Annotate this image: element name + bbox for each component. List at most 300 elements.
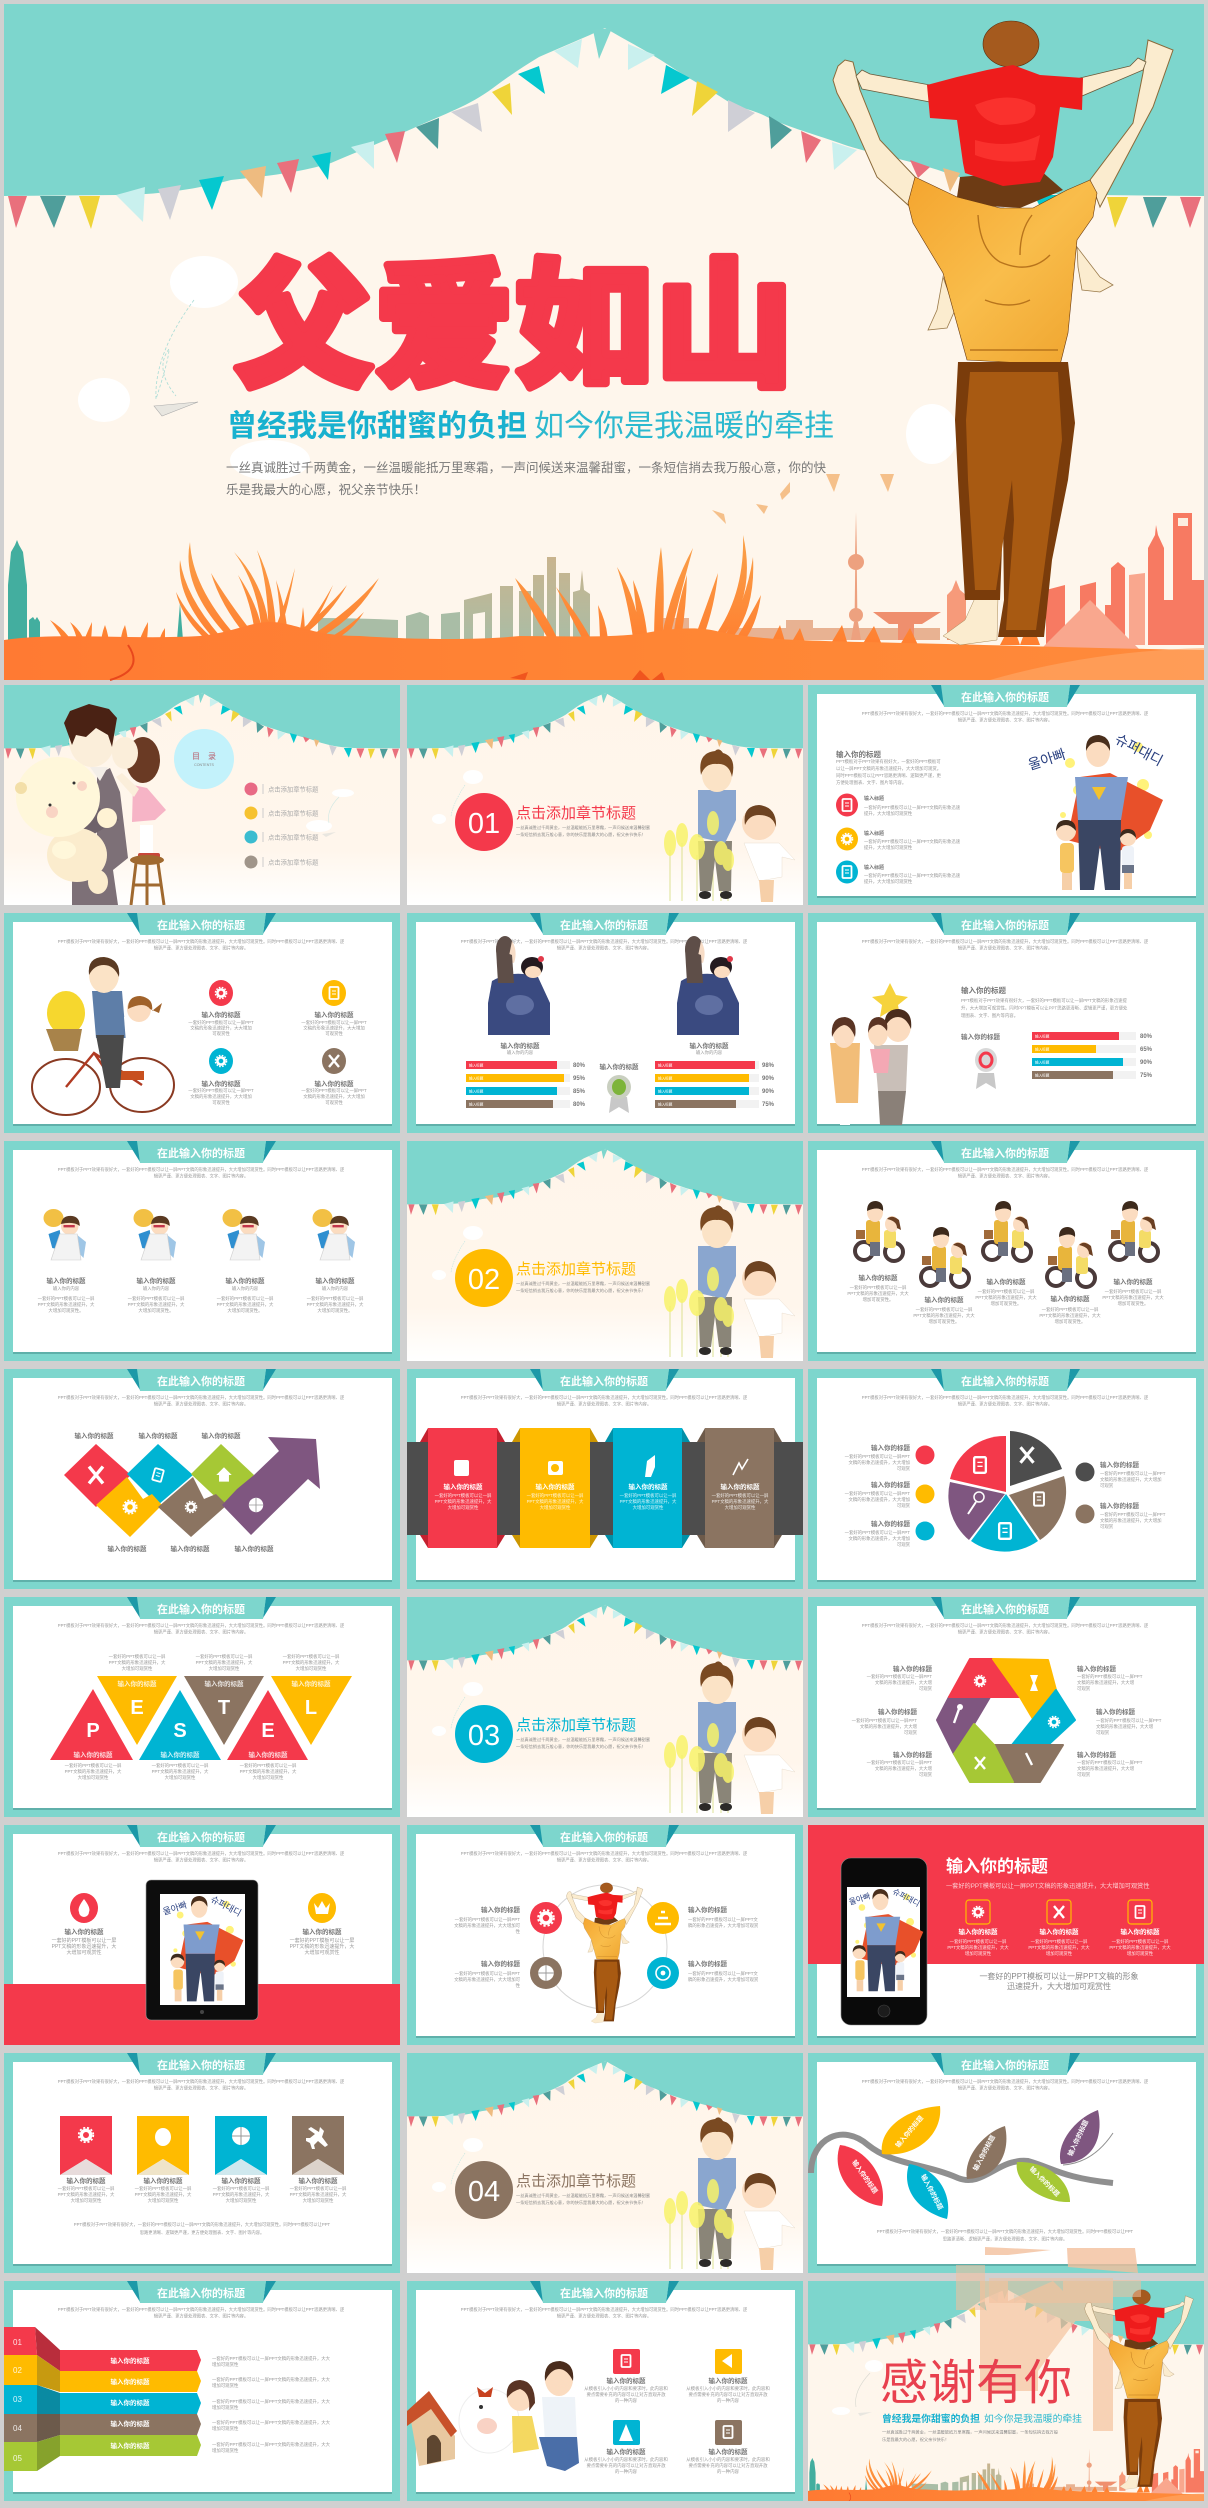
right heading bbox=[690, 1042, 728, 1054]
chapter description: 一条短信捎去我万般心意，你的快乐是我最大的心愿，祝父亲节快乐！ bbox=[516, 831, 646, 838]
description: 辑更严谨、更方便处理图表、文字、图片等内容。 bbox=[958, 1172, 1052, 1180]
bar label and badge: 输入你的标题 bbox=[961, 1032, 1000, 1041]
text blocks: 可观赏性 bbox=[212, 1030, 230, 1037]
right text: 增加可观赏性 bbox=[212, 2447, 239, 2454]
top text blocks: 一套好的PPT模板可以让一屏 bbox=[283, 1653, 340, 1660]
column 1: 大增加可观赏性。 bbox=[48, 1307, 84, 1314]
text blocks: 要点需要补充的内容可以让对方直观开放 bbox=[586, 2391, 666, 2398]
text blocks: 一套好的PPT模板可以让一屏PPT bbox=[188, 1019, 254, 1026]
item 3: PPT文稿的形象迅速提升，大大 bbox=[975, 1294, 1037, 1301]
leaves: 输入你的标题 bbox=[850, 2158, 880, 2196]
column 3: PPT文稿的形象迅速提升，大 bbox=[217, 1301, 274, 1308]
description: 辑更严谨、更方便处理图表、文字、图片等内容。 bbox=[557, 1400, 651, 1408]
right text blocks: 可观赏 bbox=[1100, 1482, 1114, 1489]
right text blocks: 文稿的形象迅速提升，大大增加 bbox=[1100, 1476, 1161, 1483]
chapter description bbox=[516, 1280, 650, 1294]
bottom text blocks: 一套好的PPT模板可以让一屏 bbox=[65, 1762, 122, 1769]
city skyline and grass bbox=[4, 512, 1204, 680]
left dots bbox=[916, 1446, 934, 1540]
text blocks: 要点需要补充的内容可以让对方直观开放 bbox=[688, 2462, 768, 2469]
flag 1: 大增加可观赏性 bbox=[71, 2197, 102, 2204]
ribbon title: 在此输入你的标题 bbox=[961, 1602, 1049, 1616]
description: 辑更严谨、更方便处理图表、文字、图片等内容。 bbox=[958, 944, 1052, 952]
right text blocks: 可观赏 bbox=[1100, 1523, 1114, 1530]
feature 3 bbox=[1109, 1927, 1171, 1957]
bottom labels: 输入你的标题 bbox=[108, 1544, 147, 1553]
text blocks: 要点需要补充的内容可以让对方直观开放 bbox=[586, 2462, 666, 2469]
description: 辑更严谨、更方便处理图表、文字、图片等内容。 bbox=[958, 716, 1052, 724]
description bbox=[461, 1394, 748, 1408]
phone with illustration: 슈퍼대디 bbox=[891, 1887, 921, 1909]
slide: chapter 03 bbox=[407, 1597, 803, 1817]
right bar chart: 输入标题 bbox=[658, 1062, 673, 1068]
city skyline and grass bbox=[808, 2449, 1204, 2504]
icon list: 一套好的PPT模板可以让一屏PPT文稿的形象迅速 bbox=[864, 872, 961, 879]
description: PPT模板对于PPT效果有很好大，一套好的PPT模板可以让一屏PPT文稿的形象迅速提升，大大增加可观赏性。同时PPT模板可以让PPT思路更清晰、逻 bbox=[58, 2078, 345, 2085]
icon circles bbox=[530, 1902, 679, 1989]
icons bbox=[613, 2349, 742, 2445]
right bar chart: 98% bbox=[762, 1063, 775, 1069]
text blocks: 从模板引入小小的内容和要求时，此内容和 bbox=[584, 2456, 668, 2463]
slide: thank you bbox=[808, 2271, 1204, 2504]
bottom text blocks: 大增加可观赏性 bbox=[165, 1774, 196, 1781]
chapter description: 一丝真诚胜过千两黄金，一丝温暖能抵万里寒霜，一声问候送来温馨甜蜜 bbox=[516, 2192, 650, 2199]
description: PPT模板对于PPT效果有很好大，一套好的PPT模板可以让一屏PPT文稿的形象迅速提升，大大增加可观赏性。同时PPT模板可以让PPT思路更清晰、逻 bbox=[461, 938, 748, 945]
left bar chart: 80% bbox=[573, 1102, 586, 1108]
description: PPT模板对于PPT效果有很好大，一套好的PPT模板可以让一屏PPT文稿的形象迅速提升，大大增加可观赏性。同时PPT模板可以让PPT思路更清晰、逻 bbox=[461, 2306, 748, 2313]
left text blocks: 可观赏 bbox=[919, 1771, 933, 1778]
text blocks: 可观赏性 bbox=[325, 1030, 343, 1037]
PESTEL triangles: P bbox=[86, 1720, 100, 1742]
item 2: 一套好的PPT模板可以让一屏 bbox=[916, 1306, 973, 1313]
bottom labels: 输入你的标题 bbox=[170, 1544, 210, 1553]
text blocks bbox=[584, 2376, 770, 2475]
slide: four ribbon columns bbox=[407, 1369, 803, 1589]
top text blocks: PPT文稿的形象迅速提升，大 bbox=[109, 1659, 166, 1666]
chapter description bbox=[516, 1736, 650, 1750]
slide: father ring bbox=[407, 1825, 803, 2045]
feature 1 bbox=[947, 1927, 1009, 1957]
contents badge: CONTENTS bbox=[194, 763, 214, 767]
column 1 bbox=[428, 1428, 497, 1548]
feature 2: 一套好的PPT模板可以让一屏 bbox=[1031, 1938, 1088, 1945]
text blocks: 从模板引入小小的内容和要求时，此内容和 bbox=[686, 2385, 770, 2392]
cloud and paper plane bbox=[832, 2360, 883, 2416]
birds bbox=[712, 474, 894, 524]
column 3: 输入你的标题 bbox=[226, 1276, 265, 1285]
item 5: PPT文稿的形象迅速提升，大大 bbox=[1102, 1294, 1164, 1301]
item 3: 一套好的PPT模板可以让一屏 bbox=[978, 1288, 1035, 1295]
right text blocks: 可观赏 bbox=[1096, 1729, 1110, 1736]
right text: 增加可观赏性 bbox=[212, 2425, 239, 2432]
right text blocks: 文稿的形象迅速提升，大大增 bbox=[1096, 1723, 1153, 1730]
description bbox=[58, 1850, 345, 1864]
chapter description bbox=[516, 825, 650, 837]
description: 辑更严谨、更方便处理图表、文字、图片等内容。 bbox=[154, 944, 248, 952]
top text blocks: 大增加可观赏性 bbox=[296, 1665, 327, 1672]
description bbox=[862, 1166, 1149, 1180]
ribbon title: 在此输入你的标题 bbox=[961, 1146, 1049, 1160]
bottom text blocks: 大增加可观赏性 bbox=[78, 1774, 109, 1781]
description: 辑更严谨、更方便处理图表、文字、图片等内容。 bbox=[557, 1856, 651, 1864]
flag 4: 大增加可观赏性 bbox=[303, 2197, 334, 2204]
numbered tabs and bands: 输入你的标题 bbox=[110, 2377, 150, 2386]
ring bbox=[543, 1885, 667, 2009]
text block bbox=[836, 749, 942, 786]
right text: 增加可观赏性 bbox=[212, 2382, 239, 2389]
right text: 增加可观赏性 bbox=[212, 2361, 239, 2368]
right text blocks: 输入你的标题 bbox=[1077, 1664, 1116, 1673]
column 4: 输入你的标题 bbox=[316, 1276, 355, 1285]
bunting and teal canopy bbox=[4, 4, 1204, 229]
right text: 一套好的PPT模板可以让一屏PPT文稿的形象迅速提升，大大 bbox=[212, 2355, 331, 2362]
description: 辑更严谨、更方便处理图表、文字、图片等内容。 bbox=[557, 944, 651, 952]
body text bbox=[882, 2428, 1059, 2443]
column 3: 一套好的PPT模板可以让一屏 bbox=[620, 1492, 677, 1499]
flag 3: 输入你的标题 bbox=[222, 2176, 261, 2185]
illustration: father girl and bear bbox=[15, 704, 166, 905]
icons bbox=[209, 980, 346, 1074]
text block: PPT模板对于PPT效果有很好大，一套好的PPT模板可以让一屏PPT文稿的形象迅速提 bbox=[961, 997, 1127, 1004]
column 1: PPT文稿的形象迅速提升，大 bbox=[38, 1301, 95, 1308]
top labels bbox=[74, 1431, 241, 1440]
leaves: 输入你的标题 bbox=[919, 2172, 946, 2212]
column 2: 输入你的标题 bbox=[136, 1276, 176, 1285]
bottom text blocks: 一套好的PPT模板可以让一屏 bbox=[240, 1762, 297, 1769]
description: PPT模板对于PPT效果有很好大，一套好的PPT模板可以让一屏PPT文稿的形象迅速提升，大大增加可观赏性。同时PPT模板可以让PPT思路更清晰、逻 bbox=[862, 1622, 1149, 1629]
column 1: 输入你的内容 bbox=[53, 1285, 80, 1292]
chapter number: 04 bbox=[468, 2176, 500, 2208]
right text: 一套好的PPT模板可以让一屏PPT文稿的形象迅速提升，大大 bbox=[212, 2419, 331, 2426]
column 4: 大增加可观赏性。 bbox=[317, 1307, 353, 1314]
slide: four figures bbox=[4, 1141, 400, 1361]
bar chart: 65% bbox=[1140, 1047, 1153, 1053]
column 4: PPT文稿的形象迅速提升，大 bbox=[307, 1301, 364, 1308]
watermark inside slide bbox=[980, 2271, 1113, 2431]
description: PPT模板对于PPT效果有很好大，一套好的PPT模板可以让一屏PPT文稿的形象迅速提升，大大增加可观赏性。同时PPT模板可以让PPT思路更清晰、逻 bbox=[58, 1622, 345, 1629]
sub-heading: 一套好的PPT模板可以让一屏PPT文稿的形象迅速提升，大大增加可观赏性 bbox=[946, 1882, 1150, 1890]
text block: 输入你的标题 bbox=[836, 749, 881, 759]
column 2: 一套好的PPT模板可以让一屏 bbox=[128, 1295, 185, 1302]
left text blocks: 文稿的形象迅速提升，大大增 bbox=[860, 1723, 917, 1730]
icons bbox=[966, 1900, 1152, 1924]
left text blocks bbox=[845, 1443, 911, 1548]
description: 辑更严谨、更方便处理图表、文字、图片等内容。 bbox=[557, 2312, 651, 2320]
PESTEL triangles: E bbox=[130, 1697, 144, 1719]
slide: pie chart bbox=[808, 1369, 1204, 1589]
text block: 方便处理图表、文字、图片等内容。 bbox=[836, 779, 906, 786]
description bbox=[862, 938, 1149, 952]
bar chart: 输入标题 bbox=[1035, 1060, 1050, 1064]
ribbon title: 在此输入你的标题 bbox=[961, 1374, 1049, 1388]
center badge bbox=[600, 1062, 639, 1113]
bottom labels bbox=[108, 1544, 274, 1553]
right text blocks: 输入你的标题 bbox=[1100, 1460, 1140, 1469]
illustration: superhero dad bbox=[1026, 731, 1166, 890]
lower caption: 迅速提升，大大增加可观赏性 bbox=[1007, 1981, 1111, 1991]
description: 辑更严谨、更方便处理图表、文字、图片等内容。 bbox=[958, 2084, 1052, 2092]
text blocks: 的一种内容 bbox=[615, 2397, 638, 2404]
item 3 bbox=[975, 1201, 1037, 1307]
paragraph: PPT模板对于PPT效果有很好大，一套好的PPT模板可以让一屏PPT文稿的形象迅速提升，大大增加可观赏性。同时PPT模板可以让PPT bbox=[74, 2221, 331, 2228]
top text blocks: 大增加可观赏性 bbox=[122, 1665, 153, 1672]
ribbon title: 在此输入你的标题 bbox=[157, 918, 245, 932]
top labels: 输入你的标题 bbox=[138, 1431, 178, 1440]
body text: 乐是我最大的心愿，祝父亲节快乐！ bbox=[882, 2436, 949, 2443]
left text blocks: 输入你的标题 bbox=[878, 1707, 918, 1716]
numbered tabs and bands: 输入你的标题 bbox=[110, 2419, 150, 2428]
leaves: 输入你的标题 bbox=[1065, 2118, 1090, 2158]
right text blocks: 一套好的PPT模板可以让一屏PPT bbox=[1100, 1470, 1166, 1477]
bottom text blocks: PPT文稿的形象迅速提升，大 bbox=[65, 1768, 122, 1775]
ribbon title: 在此输入你的标题 bbox=[560, 918, 648, 932]
flag 3: 大增加可观赏性 bbox=[226, 2197, 257, 2204]
bar chart: 90% bbox=[1140, 1060, 1153, 1066]
description: 辑更严谨、更方便处理图表、文字、图片等内容。 bbox=[154, 1172, 248, 1180]
column 4: PPT文稿的形象迅速提升，大 bbox=[712, 1498, 769, 1505]
text block: 同时PPT模板可以让PPT思路更清晰、逻辑更严谨，更 bbox=[836, 772, 942, 779]
feature 3: 增加可观赏性 bbox=[1127, 1950, 1154, 1957]
cloud and paper plane bbox=[306, 789, 354, 837]
right text blocks: 输入你的标题 bbox=[1096, 1707, 1136, 1716]
lower caption: 一套好的PPT模板可以让一屏PPT文稿的形象 bbox=[979, 1971, 1139, 1981]
column 4 bbox=[307, 1209, 364, 1314]
chapter description: 一丝真诚胜过千两黄金，一丝温暖能抵万里寒霜，一声问候送来温馨甜蜜 bbox=[516, 1736, 650, 1743]
illustration: doghouse dog and family bbox=[407, 2361, 579, 2471]
description bbox=[862, 710, 1148, 722]
description: PPT模板对于PPT效果有很好大，一套好的PPT模板可以让一屏PPT文稿的形象迅速提升，大大增加可观赏性。同时PPT模板可以让PPT思路更清晰、逻 bbox=[58, 1166, 345, 1173]
slide: family with bars bbox=[808, 913, 1204, 1133]
text blocks: 的一种内容 bbox=[717, 2468, 740, 2475]
paper plane with dashed trail bbox=[154, 300, 198, 416]
left text blocks: 可观赏 bbox=[897, 1502, 911, 1509]
flag 2: 大增加可观赏性 bbox=[148, 2197, 179, 2204]
numbered tabs and bands bbox=[4, 2327, 201, 2471]
description bbox=[58, 1394, 345, 1408]
feature 1: PPT文稿的形象迅速提升，大大 bbox=[947, 1944, 1009, 1951]
PESTEL triangles: T bbox=[218, 1697, 230, 1719]
left text blocks: 可观赏 bbox=[897, 1541, 911, 1548]
icon list: 提升，大大增加可观赏性 bbox=[864, 844, 913, 851]
left text blocks: 输入你的标题 bbox=[871, 1480, 910, 1489]
right bar chart: 输入标题 bbox=[658, 1102, 673, 1106]
text blocks: 的一种内容 bbox=[615, 2468, 638, 2475]
item 4: PPT文稿的形象迅速提升，大大 bbox=[1039, 1312, 1101, 1319]
text blocks: 从模板引入小小的内容和要求时，此内容和 bbox=[584, 2385, 668, 2392]
description: PPT模板对于PPT效果有很好大，一套好的PPT模板可以让一屏PPT文稿的形象迅速提升，大大增加可观赏性。同时PPT模板可以让PPT思路更清晰、逻 bbox=[58, 938, 345, 945]
item 1: 增加可观赏性。 bbox=[863, 1296, 893, 1303]
text blocks: 输入你的标题 bbox=[606, 2447, 646, 2456]
description bbox=[461, 2306, 748, 2320]
column 3 bbox=[217, 1209, 274, 1314]
column 4: 一套好的PPT模板可以让一屏 bbox=[307, 1295, 364, 1302]
illustration: superhero dad: 울아빠 bbox=[1026, 746, 1068, 773]
flag 2: 输入你的标题 bbox=[144, 2176, 183, 2185]
right text blocks: 一套好的PPT模板可以让一屏PPT bbox=[1096, 1717, 1162, 1724]
left text block: PPT文稿的形象迅速提升，大 bbox=[52, 1943, 116, 1950]
flag 4: 输入你的标题 bbox=[298, 2176, 338, 2185]
slide: numbered ribbons bbox=[4, 2281, 400, 2501]
flag 1: 一套好的PPT模板可以让一屏 bbox=[58, 2185, 115, 2192]
left text blocks: 文稿的形象迅速提升，大大增 bbox=[875, 1679, 932, 1686]
numbered tabs and bands: 01 bbox=[13, 2338, 22, 2347]
chapter number bbox=[455, 1705, 513, 1763]
contents badge bbox=[174, 729, 234, 789]
text block: 以让一屏PPT文稿的形象迅速提升，大大增加可观赏。 bbox=[836, 765, 941, 772]
top labels: 输入你的标题 bbox=[202, 1431, 241, 1440]
PESTEL triangles: L bbox=[305, 1697, 317, 1719]
description bbox=[58, 1166, 345, 1180]
PESTEL triangles bbox=[50, 1676, 352, 1760]
slide: contents bbox=[4, 685, 400, 905]
PESTEL triangles: 输入你的标题 bbox=[74, 1750, 113, 1759]
icon list: 提升，大大增加可观赏性 bbox=[864, 810, 913, 817]
flag 4 bbox=[290, 2116, 347, 2204]
illustration: father and child bbox=[664, 1205, 795, 1358]
column folds bbox=[420, 1428, 782, 1548]
right text blocks: 一套好的PPT模板可以让一屏PPT bbox=[1100, 1511, 1166, 1518]
right text blocks: 稿的形象迅速提升，大大增加可观赏 bbox=[688, 1976, 759, 1983]
body text: 一丝真诚胜过千两黄金，一丝温暖能抵万里寒霜，一声问候送来温馨甜蜜，一条短信捎去我万般心意，你的快 bbox=[226, 460, 827, 475]
tablet with illustration: 슈퍼대디 bbox=[209, 1894, 243, 1918]
text blocks: 要点需要补充的内容可以让对方直观开放 bbox=[688, 2391, 768, 2398]
top text blocks: PPT文稿的形象迅速提升，大 bbox=[283, 1659, 340, 1666]
left text blocks: 一套好的PPT模板可以让一屏PPT bbox=[867, 1673, 932, 1680]
column 2: 一套好的PPT模板可以让一屏 bbox=[527, 1492, 584, 1499]
text blocks: 一套好的PPT模板可以让一屏PPT bbox=[188, 1087, 254, 1094]
item 5: 输入你的标题 bbox=[1114, 1277, 1153, 1286]
description: PPT模板对于PPT效果有很好大，一套好的PPT模板可以让一屏PPT文稿的形象迅速提升，大大增加可观赏性。同时PPT模板可以让PPT思路更清晰、逻 bbox=[461, 1394, 748, 1401]
left text blocks: 文稿的形象迅速提升，大大增加 bbox=[849, 1459, 910, 1466]
bar chart bbox=[1032, 1032, 1153, 1079]
paragraph: 思路更清晰、逻辑更严谨，更方便处理图表、文字、图片等内容。 bbox=[943, 2236, 1067, 2242]
left bar chart: 输入标题 bbox=[469, 1102, 484, 1106]
description: 辑更严谨、更方便处理图表、文字、图片等内容。 bbox=[958, 1400, 1052, 1408]
chapter description: 一丝真诚胜过千两黄金，一丝温暖能抵万里寒霜，一声问候送来温馨甜蜜 bbox=[516, 824, 650, 831]
feature 3: 输入你的标题 bbox=[1120, 1927, 1160, 1936]
right text bbox=[212, 2355, 331, 2454]
zigzag diagram bbox=[64, 1437, 320, 1537]
flag 3: 一套好的PPT模板可以让一屏 bbox=[213, 2185, 270, 2192]
item 3: 增加可观赏性。 bbox=[991, 1300, 1021, 1307]
right bar chart: 输入标题 bbox=[658, 1088, 673, 1094]
slide: bookmark flags bbox=[4, 2053, 400, 2273]
body text bbox=[226, 460, 827, 497]
heading: 输入你的标题 bbox=[946, 1856, 1048, 1876]
flag 1 bbox=[58, 2116, 115, 2204]
PESTEL triangles: 输入你的标题 bbox=[204, 1679, 244, 1688]
bar chart: 输入标题 bbox=[1035, 1046, 1050, 1052]
illustration: family with star balloon bbox=[830, 983, 911, 1125]
contents list: 点击添加章节标题 bbox=[268, 808, 319, 818]
chapter title: 点击添加章节标题 bbox=[516, 804, 636, 822]
left text blocks: 输入你的标题 bbox=[481, 1959, 520, 1968]
subtitle: 曾经我是你甜蜜的负担 bbox=[227, 410, 527, 443]
description bbox=[58, 2078, 345, 2092]
right text block: 输入你的标题 bbox=[302, 1927, 342, 1936]
chapter description bbox=[516, 2192, 650, 2206]
right text blocks: 一套好的PPT模板可以让一屏PPT文 bbox=[688, 1970, 758, 1977]
text block: 理图表、文字、图片等内容。 bbox=[961, 1012, 1018, 1019]
text blocks: 文稿的形象迅速提升，大大增加 bbox=[190, 1024, 252, 1032]
column 1: 大增加可观赏性 bbox=[448, 1504, 479, 1511]
right text blocks: 文稿的形象迅速提升，大大增加 bbox=[1100, 1517, 1161, 1524]
left text block bbox=[52, 1927, 116, 1956]
flag 2: 一套好的PPT模板可以让一屏 bbox=[135, 2185, 192, 2192]
left bar chart: 85% bbox=[573, 1089, 586, 1095]
feature 1: 输入你的标题 bbox=[958, 1927, 998, 1936]
column 3 bbox=[613, 1428, 682, 1548]
icon list bbox=[836, 794, 961, 885]
icon list: 输入标题 bbox=[864, 830, 884, 837]
feature 1: 增加可观赏性 bbox=[965, 1950, 992, 1957]
slide: chapter 01 bbox=[407, 685, 803, 905]
slide: tablet bbox=[4, 1825, 400, 2045]
phone with illustration bbox=[841, 1858, 927, 2025]
left text blocks: 一套好的PPT模板可以让一屏PPT bbox=[845, 1490, 910, 1497]
right text: 一套好的PPT模板可以让一屏PPT文稿的形象迅速提升，大大 bbox=[212, 2441, 331, 2448]
feature 3: PPT文稿的形象迅速提升，大大 bbox=[1109, 1944, 1171, 1951]
item 4: 一套好的PPT模板可以让一屏 bbox=[1042, 1306, 1099, 1313]
top text blocks: 大增加可观赏性 bbox=[209, 1665, 240, 1672]
left bar chart: 输入标题 bbox=[469, 1076, 484, 1080]
right text blocks bbox=[688, 1905, 759, 1983]
left heading: 输入你的标题 bbox=[500, 1041, 540, 1050]
subtitle: 如今你是我温暖的牵挂 bbox=[984, 2412, 1082, 2425]
bottom text blocks: 大增加可观赏性 bbox=[253, 1774, 284, 1781]
column 3: 输入你的标题 bbox=[628, 1482, 668, 1491]
left text blocks: 文稿的形象迅速提升，大大增加 bbox=[849, 1535, 910, 1542]
column 4: 输入你的标题 bbox=[720, 1482, 760, 1491]
slide: zigzag arrow bbox=[4, 1369, 400, 1589]
description: 辑更严谨、更方便处理图表、文字、图片等内容。 bbox=[958, 1628, 1052, 1636]
PESTEL triangles: 输入你的标题 bbox=[160, 1750, 200, 1759]
icon list: 输入标题 bbox=[864, 795, 884, 802]
chapter number: 03 bbox=[468, 1720, 500, 1752]
item 2: 输入你的标题 bbox=[924, 1295, 964, 1304]
right text blocks: 可观赏 bbox=[1077, 1771, 1091, 1778]
clouds bbox=[78, 256, 958, 480]
ribbon title: 在此输入你的标题 bbox=[961, 690, 1049, 704]
left text blocks: 一套好的PPT模板可以让一屏PPT bbox=[852, 1717, 917, 1724]
description: PPT模板对于PPT效果有很好大，一套好的PPT模板可以让一屏PPT文稿的形象迅速提升，大大增加可观赏性。同时PPT模板可以让PPT思路更清晰、逻 bbox=[58, 1850, 345, 1857]
right text block: 大增加可观赏性 bbox=[304, 1949, 340, 1956]
left text blocks: 文稿的形象迅速提升，大大增加可 bbox=[454, 1976, 521, 1983]
description: PPT模板对于PPT效果有很好大，一套好的PPT模板可以让一屏PPT文稿的形象迅速提升，大大增加可观赏性。同时PPT模板可以让PPT思路更清晰、逻 bbox=[862, 2078, 1149, 2085]
feature 2: 输入你的标题 bbox=[1040, 1927, 1079, 1936]
bottom text blocks: PPT文稿的形象迅速提升，大 bbox=[152, 1768, 209, 1775]
right bar chart: 90% bbox=[762, 1076, 775, 1082]
left text blocks: 输入你的标题 bbox=[893, 1664, 932, 1673]
right text blocks bbox=[1077, 1664, 1162, 1778]
ribbon title: 在此输入你的标题 bbox=[157, 1830, 245, 1844]
red band bbox=[4, 1984, 400, 2045]
description: 辑更严谨、更方便处理图表、文字、图片等内容。 bbox=[154, 2312, 248, 2320]
top text blocks: 一套好的PPT模板可以让一屏 bbox=[109, 1653, 166, 1660]
paragraph bbox=[74, 2221, 331, 2236]
text blocks: 可观赏性 bbox=[325, 1099, 343, 1106]
left text blocks: 输入你的标题 bbox=[871, 1519, 910, 1528]
column 3: 输入你的内容 bbox=[232, 1285, 259, 1292]
ribbon title: 在此输入你的标题 bbox=[157, 2058, 245, 2072]
contents list: 点击添加章节标题 bbox=[268, 832, 319, 842]
leaves: 输入你的标题 bbox=[893, 2113, 925, 2149]
feature 2: PPT文稿的形象迅速提升，大大 bbox=[1028, 1944, 1090, 1951]
left text blocks: 文稿的形象迅速提升，大大增加可 bbox=[454, 1922, 521, 1929]
column 1 bbox=[38, 1209, 95, 1314]
center badge: 输入你的标题 bbox=[600, 1062, 639, 1071]
right text blocks: 一套好的PPT模板可以让一屏PPT文 bbox=[688, 1916, 758, 1923]
